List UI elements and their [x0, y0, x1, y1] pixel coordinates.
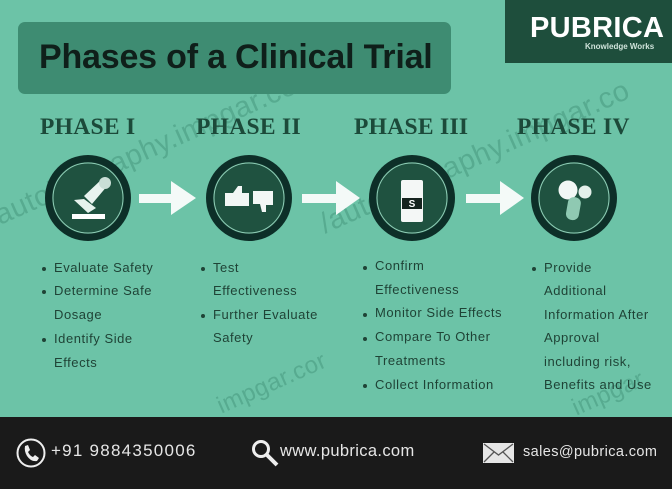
icon: envelope [483, 443, 514, 463]
arrow 3 [466, 181, 524, 215]
phase 3 list: Monitor Side Effects [375, 305, 502, 320]
phase heading 4: PHASE IV [517, 114, 630, 140]
phase diagram: icons and arrows [45, 155, 617, 241]
phase 4 list: Information After [544, 307, 649, 322]
arrow 1 [139, 181, 196, 215]
phase 1 list: Identify Side [54, 331, 133, 346]
footer bar [0, 417, 672, 489]
phase 4 list: Provide [544, 260, 592, 275]
phase 2 list: Test [213, 260, 239, 275]
phase 3 list: Effectiveness [375, 282, 459, 297]
watermark text third: impgar.cor [213, 347, 331, 419]
logo wordmark: PUBRICA [530, 12, 664, 44]
icon: pill bottle [369, 155, 455, 241]
icon: pill bottle: S [409, 199, 416, 210]
phase 1 list [42, 260, 153, 370]
phase 3 list: Compare To Other [375, 329, 490, 344]
phase 4 list [532, 260, 652, 392]
phase 2 list [201, 260, 318, 345]
phase 3 list: Treatments [375, 353, 446, 368]
icon: pills [531, 155, 617, 241]
website: www.pubrica.com [280, 442, 415, 460]
title: Phases of a Clinical Trial [39, 38, 433, 76]
phase 1 list: Evaluate Safety [54, 260, 153, 275]
icon: thumbs up and down [206, 155, 292, 241]
phase 3 list: Confirm [375, 258, 424, 273]
phase 1 list: Determine Safe [54, 283, 152, 298]
logo tagline: Knowledge Works [585, 42, 654, 51]
phase 2 list: Safety [213, 330, 253, 345]
phase 3 list: Collect Information [375, 377, 494, 392]
icon: magnifier [252, 440, 278, 466]
phase 4 list: including risk, [544, 354, 631, 369]
phase 1 list: Effects [54, 355, 97, 370]
phase 4 list: Benefits and Use [544, 377, 652, 392]
icon: microscope [45, 155, 131, 241]
phase 4 list: Approval [544, 330, 600, 345]
watermark text second: /autobiography.impgar.co [315, 74, 635, 240]
phase 2 list: Effectiveness [213, 283, 297, 298]
arrow 2 [302, 181, 360, 215]
watermark text fourth: impgar [568, 366, 649, 421]
icon: phone [16, 438, 46, 468]
phase heading 1: PHASE I [40, 114, 135, 140]
phase heading 2: PHASE II [196, 114, 301, 140]
phase 4 list: Additional [544, 283, 607, 298]
email: sales@pubrica.com [523, 444, 657, 460]
phase heading 3: PHASE III [354, 114, 468, 140]
phone number: +91 9884350006 [51, 441, 197, 460]
phase 2 list: Further Evaluate [213, 307, 318, 322]
phase 3 list [363, 258, 502, 392]
logo panel [505, 0, 672, 63]
title panel [18, 22, 451, 94]
phase 1 list: Dosage [54, 307, 102, 322]
